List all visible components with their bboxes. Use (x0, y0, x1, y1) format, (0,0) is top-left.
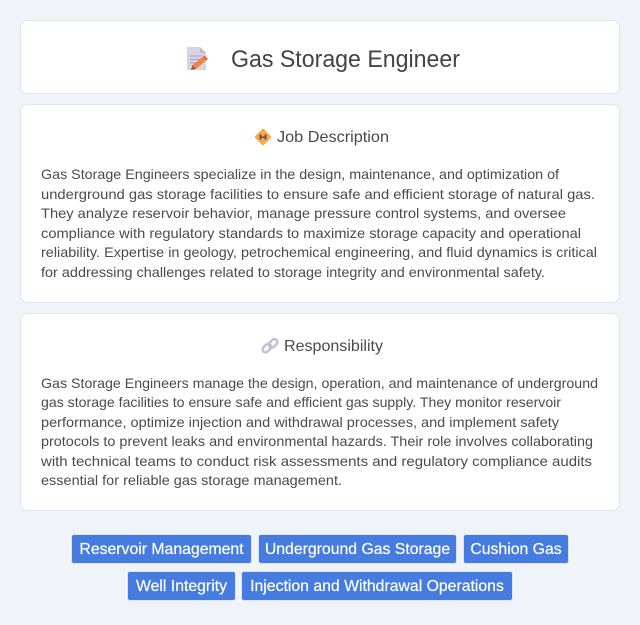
tag: underground gas storage: Underground Gas Storage (265, 541, 450, 558)
text block: job description: underground gas storage facilities to ensure safe and efficient storage of natural gas. (41, 186, 595, 202)
text block: job description (41, 166, 597, 280)
tag: injection and withdrawal operations: Injection and Withdrawal Operations (250, 578, 504, 595)
tag: cushion gas: Cushion Gas (470, 541, 562, 558)
text block: job description: compliance with regulatory standards to maximize storage capacity and operational (41, 225, 581, 241)
text block: responsibility: Gas Storage Engineers manage the design, operation, and maintenance of underground (41, 375, 598, 391)
icon: diamond sign (254, 128, 272, 146)
icon: document with pencil (187, 47, 208, 70)
text block: responsibility: with technical teams to conduct risk assessments and regulatory compliance audits (40, 453, 592, 469)
icon: chain link (261, 338, 279, 354)
tag: well integrity (127, 571, 236, 601)
tag: underground gas storage (258, 534, 457, 564)
tag: well integrity: Well Integrity (136, 578, 227, 595)
panel: responsibility (20, 313, 620, 511)
tag: reservoir management: Reservoir Management (79, 541, 244, 558)
heading: job description: Job Description (277, 129, 389, 146)
tag: injection and withdrawal operations (241, 571, 513, 601)
text block: responsibility: gas storage facilities to ensure safe and efficient gas supply. They monitor reservoir (41, 394, 561, 410)
tag: cushion gas (463, 534, 569, 564)
heading: responsibility: Responsibility (284, 338, 383, 355)
text block: job description: reliability. Expertise in geology, petrochemical engineering, and fluid dynamics is critical (41, 244, 597, 260)
text block: responsibility: essential for reliable gas storage management. (41, 472, 342, 488)
text block: job description: for addressing challenges related to storage integrity and environmental safety. (41, 264, 545, 280)
panel: job description (20, 104, 620, 303)
text block: responsibility: protocols to prevent leaks and environmental hazards. Their role involves collaborating (41, 433, 593, 449)
panel: title header (20, 20, 620, 94)
text block: job description: Gas Storage Engineers specialize in the design, maintenance, and optimization of (41, 166, 559, 182)
tag: reservoir management (71, 534, 252, 564)
text block: job description: They analyze reservoir behavior, manage pressure control systems, and oversee (41, 205, 566, 221)
title: Gas Storage Engineer (231, 46, 460, 73)
text block: responsibility: performance, optimize injection and withdrawal processes, and implement safety (41, 414, 559, 430)
text block: responsibility (40, 375, 598, 488)
